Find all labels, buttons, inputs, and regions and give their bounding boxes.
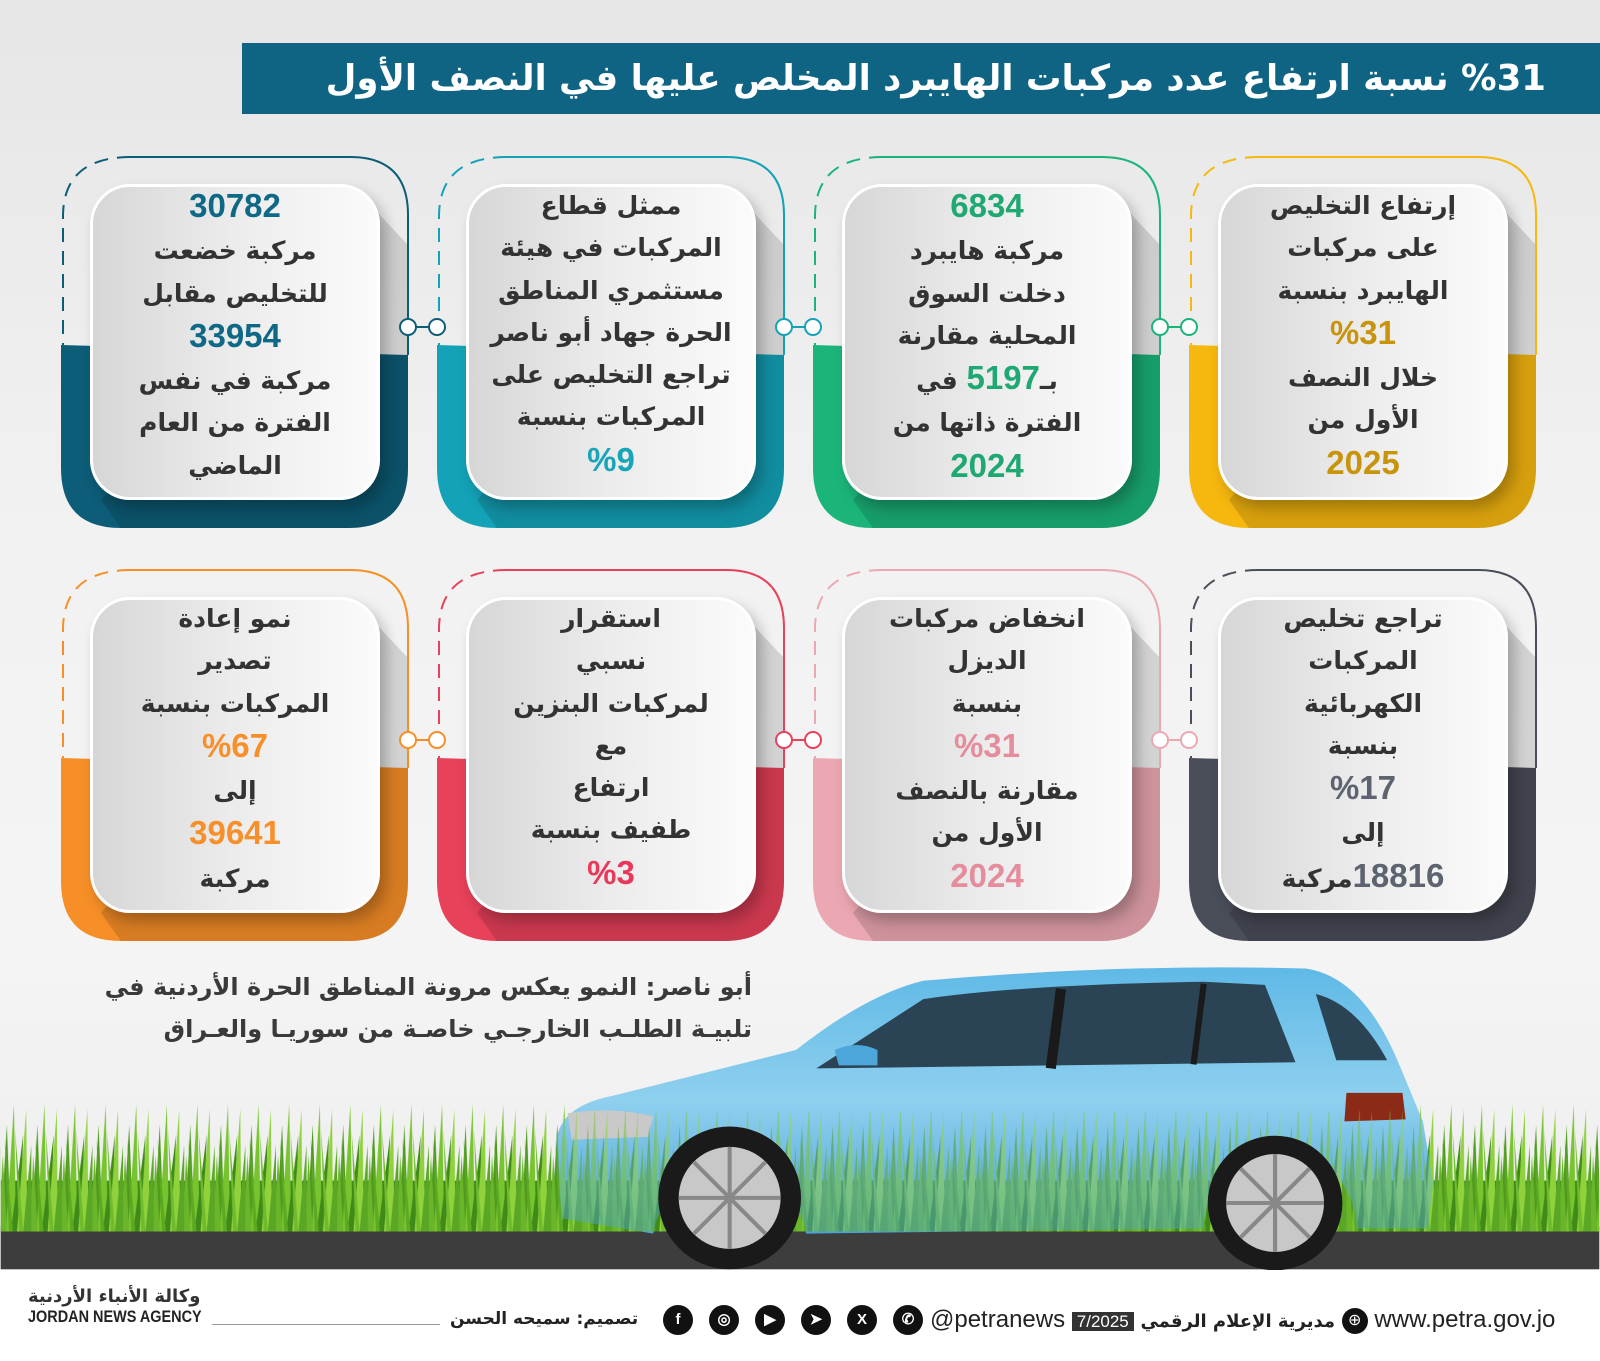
card: diesel 31%: انخفاض مركبات <box>889 604 1085 633</box>
card: Abu Nasser 9%: مستثمري المناطق <box>498 276 724 305</box>
card: re-export 67% <box>61 569 409 941</box>
text: ◎ <box>717 1311 731 1328</box>
text: ▶ <box>764 1311 776 1328</box>
text: ➤ <box>810 1311 822 1328</box>
card: 6834 hybrid vehicles: مركبة هايبرد <box>910 236 1064 265</box>
card: diesel 31%: 2024 <box>950 857 1024 894</box>
card: diesel 31%: الديزل <box>947 646 1027 675</box>
card: diesel 31%: مقارنة بالنصف <box>895 776 1079 805</box>
car <box>556 967 1443 1270</box>
card: 30782 vs 33954: 30782 <box>189 187 281 224</box>
quote text: أبو ناصر: النمو يعكس مرونة المناطق الحرة الأردنية في <box>105 973 752 1001</box>
designer credit: تصميم: سميحه الحسن <box>450 1309 638 1329</box>
card: hybrid customs rise 31%: على مركبات <box>1287 233 1439 262</box>
card: hybrid customs rise 31%: %31 <box>1330 314 1396 351</box>
card: Abu Nasser 9%: الحرة جهاد أبو ناصر <box>490 318 732 347</box>
card: diesel 31% <box>813 569 1161 941</box>
handle and site: @petranews 7/2025 مديرية الإعلام الرقمي www.petra.gov.jo <box>930 1306 1555 1333</box>
card: 6834 hybrid vehicles <box>813 156 1161 528</box>
card: Abu Nasser 9%: ممثل قطاع <box>541 191 681 220</box>
card: 6834 hybrid vehicles: المحلية مقارنة <box>898 321 1076 350</box>
card: re-export 67%: نمو إعادة <box>178 604 292 633</box>
card: petrol 3% <box>437 569 785 941</box>
card: Abu Nasser 9%: %9 <box>587 441 635 478</box>
card: 30782 vs 33954: مركبة في نفس <box>139 366 331 395</box>
card: electric vehicles 17%: 18816مركبة <box>1282 857 1444 894</box>
agency logo: JORDAN NEWS AGENCY <box>28 1307 202 1326</box>
card: electric vehicles 17%: %17 <box>1330 769 1396 806</box>
card: 6834 hybrid vehicles: الفترة ذاتها من <box>893 408 1081 437</box>
card: hybrid customs rise 31%: الهايبرد بنسبة <box>1278 276 1448 305</box>
card: 30782 vs 33954: الماضي <box>188 451 282 480</box>
card: hybrid customs rise 31%: خلال النصف <box>1288 363 1438 392</box>
card: hybrid customs rise 31%: 2025 <box>1326 444 1400 481</box>
card: hybrid customs rise 31%: الأول من <box>1307 405 1419 434</box>
card: 6834 hybrid vehicles: دخلت السوق <box>908 279 1066 308</box>
card: re-export 67%: تصدير <box>198 646 272 675</box>
card: electric vehicles 17%: الكهربائية <box>1304 689 1422 718</box>
text: ✆ <box>902 1311 914 1328</box>
card: Abu Nasser 9%: المركبات في هيئة <box>500 233 722 262</box>
quote text: تلبيـة الطلـب الخارجـي خاصـة من سوريـا والعـراق <box>164 1015 752 1043</box>
card: 30782 vs 33954: 33954 <box>189 317 281 354</box>
agency logo: وكالة الأنباء الأردنية <box>28 1286 200 1307</box>
card: hybrid customs rise 31% <box>1189 156 1537 528</box>
agency logo <box>28 1284 202 1326</box>
card: hybrid customs rise 31%: إرتفاع التخليص <box>1270 191 1456 220</box>
card: 30782 vs 33954: للتخليص مقابل <box>142 279 328 308</box>
card: re-export 67%: 39641 <box>189 814 281 851</box>
title: %31 نسبة ارتفاع عدد مركبات الهايبرد المخلص عليها في النصف الأول <box>326 58 1546 99</box>
card: diesel 31%: بنسبة <box>952 689 1022 718</box>
card: diesel 31%: %31 <box>954 727 1020 764</box>
card: electric vehicles 17%: بنسبة <box>1328 731 1398 760</box>
card: re-export 67%: %67 <box>202 727 268 764</box>
social icons <box>663 1305 923 1335</box>
card: petrol 3%: نسبي <box>576 646 646 675</box>
handle and site: ⊕ <box>1348 1312 1361 1329</box>
footer <box>0 1270 1600 1361</box>
card: diesel 31%: الأول من <box>931 818 1043 847</box>
text: f <box>676 1311 680 1328</box>
quote text <box>105 971 752 1043</box>
card: petrol 3%: لمركبات البنزين <box>513 689 709 718</box>
card: petrol 3%: ارتفاع <box>573 773 649 802</box>
card: petrol 3%: %3 <box>587 854 635 891</box>
connectors <box>399 318 1198 749</box>
card: re-export 67%: مركبة <box>200 864 270 893</box>
road <box>1 1226 1599 1269</box>
text: X <box>857 1311 867 1328</box>
card: re-export 67%: إلى <box>213 776 257 805</box>
card: electric vehicles 17%: المركبات <box>1308 646 1418 675</box>
card: petrol 3%: استقرار <box>561 604 661 633</box>
card: electric vehicles 17%: تراجع تخليص <box>1283 604 1443 633</box>
card: 30782 vs 33954 <box>61 156 409 528</box>
card: re-export 67%: المركبات بنسبة <box>141 689 329 718</box>
card: 6834 hybrid vehicles: 6834 <box>950 187 1024 224</box>
card: Abu Nasser 9%: المركبات بنسبة <box>517 402 705 431</box>
card: Abu Nasser 9% <box>437 156 785 528</box>
card: 30782 vs 33954: مركبة خضعت <box>154 236 316 265</box>
title <box>242 43 1600 114</box>
card: petrol 3%: طفيف بنسبة <box>531 815 691 844</box>
card: Abu Nasser 9%: تراجع التخليص على <box>491 360 731 389</box>
card: 30782 vs 33954: الفترة من العام <box>139 408 331 437</box>
card: 6834 hybrid vehicles: بـ5197 في <box>916 359 1058 396</box>
card: electric vehicles 17%: إلى <box>1341 818 1385 847</box>
card: 6834 hybrid vehicles: 2024 <box>950 447 1024 484</box>
card: electric vehicles 17% <box>1189 569 1537 941</box>
card: petrol 3%: مع <box>595 731 627 760</box>
